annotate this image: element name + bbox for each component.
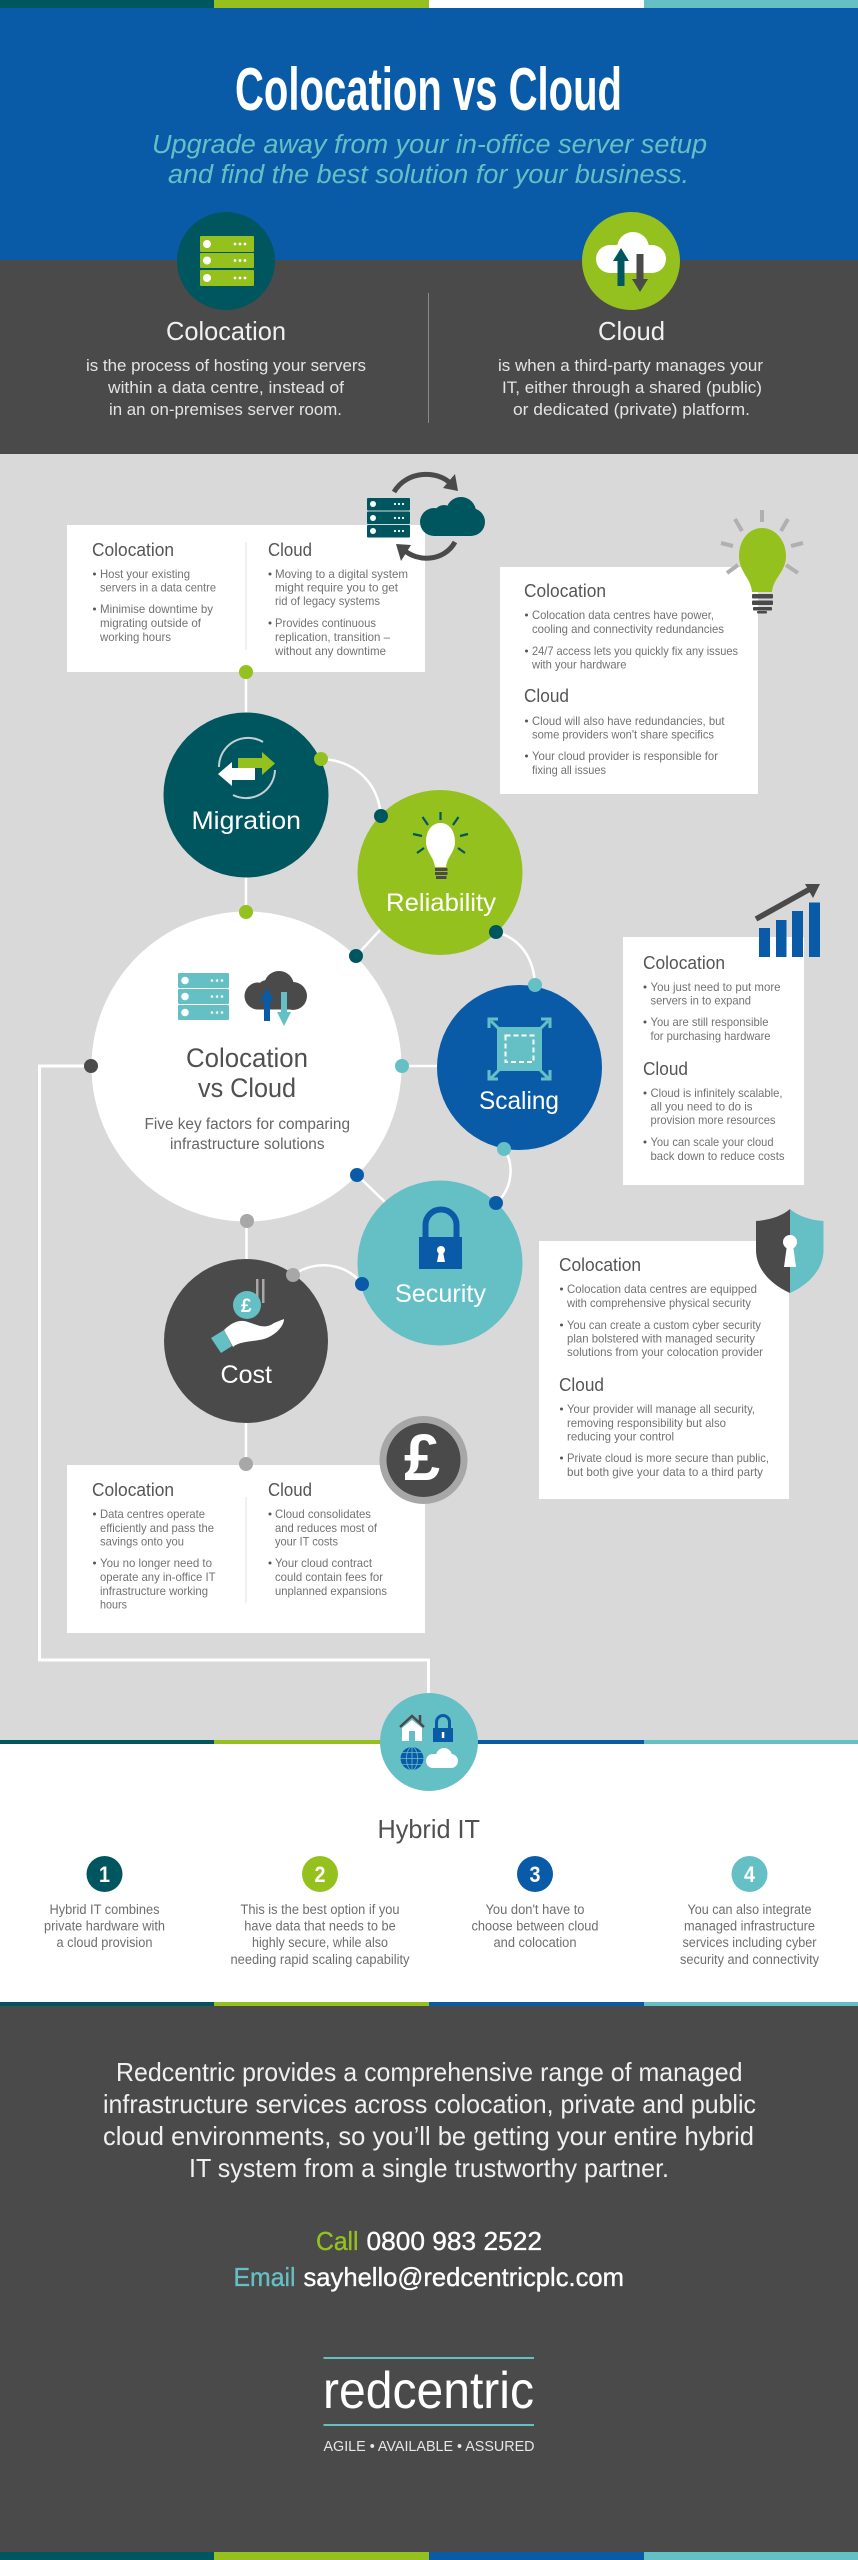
heading: colocation: Colocation: [166, 316, 286, 346]
heading: colocation: Colocation: [92, 539, 174, 560]
label: Scaling: [479, 1087, 559, 1115]
cloud security points: [560, 1402, 769, 1479]
hybrid point 2: This is the best option if you: [240, 1902, 400, 1917]
heading: cloud: Cloud: [524, 685, 569, 706]
label: Migration: [192, 807, 301, 835]
colocation scaling points: servers in to expand: [650, 994, 751, 1008]
connector dots: [84, 665, 542, 1471]
heading: cloud: Cloud: [559, 1374, 604, 1395]
central heading: vs Cloud: [198, 1073, 296, 1103]
colocation description: in an on-premises server room.: [109, 400, 342, 419]
circle: migration: [164, 712, 328, 878]
hybrid point 2: have data that needs to be: [244, 1918, 396, 1934]
heading: hybrid IT: Hybrid IT: [378, 1814, 480, 1844]
hybrid point 3: You don't have to: [486, 1902, 584, 1917]
colocation reliability points: [525, 608, 738, 672]
heading: cloud: Cloud: [268, 1479, 312, 1500]
connector lines: [40, 672, 535, 1693]
circle: scaling: [437, 985, 602, 1150]
cloud cost points: unplanned expansions: [275, 1584, 387, 1598]
hybrid point 2: highly secure, while also: [252, 1935, 388, 1950]
colocation security points: Colocation data centres are equipped: [567, 1282, 757, 1296]
colocation security points: You can create a custom cyber security: [567, 1318, 761, 1332]
cloud security points: but both give your data to a third party: [567, 1465, 763, 1479]
icon: hand holding pound coin: [211, 1279, 284, 1353]
colocation reliability points: with your hardware: [531, 658, 627, 672]
cloud security points: Your provider will manage all security,: [567, 1402, 755, 1416]
panel: cost details: [67, 1465, 425, 1633]
cloud scaling points: [644, 1086, 784, 1163]
label: Reliability: [386, 889, 497, 917]
colocation cost points: savings onto you: [100, 1534, 184, 1548]
heading: cloud: Cloud: [268, 539, 312, 560]
label: Security: [395, 1280, 486, 1308]
subtitle: Upgrade away from your in-office server setup: [152, 131, 707, 159]
icon: cloud with arrows: [244, 971, 307, 1026]
colocation migration points: [93, 567, 216, 644]
contact: email: Email: [234, 2262, 296, 2292]
hybrid point 4: 4: [744, 1862, 756, 1887]
hybrid point 1: private hardware with: [44, 1918, 165, 1934]
closing statement: cloud environments, so you’ll be getting your entire hybrid: [103, 2121, 754, 2151]
colocation cost points: Data centres operate: [100, 1507, 205, 1521]
contact: email: sayhello@redcentricplc.com: [304, 2262, 624, 2292]
colocation migration points: Minimise downtime by: [100, 602, 213, 616]
colocation description: is the process of hosting your servers: [86, 356, 366, 375]
label: Cost: [220, 1361, 272, 1389]
circle: security: [358, 1180, 522, 1346]
cloud migration points: rid of legacy systems: [275, 594, 380, 608]
panel: scaling details: [623, 937, 804, 1185]
cloud scaling points: You can scale your cloud: [650, 1135, 774, 1149]
colocation cost points: infrastructure working: [100, 1584, 208, 1598]
hybrid point 4: [680, 1856, 819, 1967]
icon: pound badge: £: [404, 1420, 440, 1494]
central subtitle: Five key factors for comparing: [144, 1116, 350, 1133]
colocation security points: plan bolstered with managed security: [567, 1332, 755, 1346]
cloud scaling points: all you need to do is: [650, 1100, 752, 1114]
hybrid point 4: You can also integrate: [688, 1902, 812, 1917]
footer: [0, 2002, 858, 2560]
logo: redcentric: redcentric: [323, 2362, 534, 2420]
central heading: [186, 1043, 308, 1103]
heading: colocation: Colocation: [524, 580, 606, 601]
cloud scaling points: Cloud is infinitely scalable,: [650, 1086, 782, 1100]
icon: server and cloud sync: [367, 474, 485, 561]
hybrid point 3: [472, 1856, 598, 1950]
title: Colocation vs Cloud: [235, 56, 622, 123]
cloud migration points: replication, transition –: [275, 630, 390, 644]
icon: shield with keyhole: [756, 1209, 824, 1293]
colocation scaling points: for purchasing hardware: [650, 1029, 771, 1043]
logo: redcentric: [323, 2357, 534, 2455]
colocation reliability points: Colocation data centres have power,: [532, 608, 714, 622]
central subtitle: infrastructure solutions: [170, 1136, 325, 1153]
closing statement: IT system from a single trustworthy partner.: [189, 2153, 669, 2183]
heading: colocation: Colocation: [643, 952, 725, 973]
cloud description: [498, 356, 763, 419]
icon: large green light bulb: [721, 510, 803, 614]
hybrid point 1: a cloud provision: [56, 1935, 152, 1950]
central subtitle: [144, 1116, 350, 1153]
cloud reliability points: fixing all issues: [532, 763, 606, 777]
cloud security points: removing responsibility but also: [567, 1416, 726, 1430]
colocation security points: [560, 1282, 763, 1359]
cloud scaling points: back down to reduce costs: [650, 1149, 784, 1163]
icon: padlock: [419, 1210, 462, 1269]
central circle: colocation vs cloud: [92, 912, 402, 1222]
panel: security details: [539, 1241, 789, 1499]
cloud reliability points: some providers won't share specifics: [532, 728, 714, 742]
icon: migration arrows: [218, 738, 275, 798]
colocation definition: [86, 212, 366, 419]
contact: call: 0800 983 2522: [366, 2226, 542, 2256]
icon: scaling square: [489, 1019, 550, 1079]
colocation description: [86, 356, 366, 419]
section: hybrid IT: [0, 1693, 858, 2002]
colocation reliability points: cooling and connectivity redundancies: [532, 622, 724, 636]
hybrid point 3: and colocation: [494, 1935, 576, 1950]
logo: redcentric: AGILE • AVAILABLE • ASSURED: [324, 2439, 534, 2455]
contact: call: Call: [316, 2226, 358, 2256]
cloud security points: Private cloud is more secure than public,: [567, 1451, 769, 1465]
cloud scaling points: provision more resources: [650, 1113, 776, 1127]
colocation reliability points: 24/7 access lets you quickly fix any issues: [532, 644, 738, 658]
cloud definition: [498, 212, 763, 419]
cloud migration points: might require you to get: [275, 580, 399, 594]
colocation security points: with comprehensive physical security: [566, 1296, 751, 1310]
cloud migration points: without any downtime: [274, 644, 386, 658]
hybrid point 2: 2: [314, 1862, 326, 1887]
cloud description: is when a third-party manages your: [498, 356, 763, 375]
closing statement: infrastructure services across colocation, private and public: [103, 2089, 756, 2119]
colocation cost points: You no longer need to: [100, 1556, 212, 1570]
colocation scaling points: You are still responsible: [650, 1015, 769, 1029]
header banner: [0, 0, 858, 260]
icon: server: [178, 973, 229, 1020]
hybrid point 1: Hybrid IT combines: [50, 1902, 160, 1917]
cloud cost points: Your cloud contract: [275, 1556, 373, 1570]
colocation scaling points: [644, 980, 781, 1043]
colocation cost points: hours: [100, 1598, 127, 1612]
cloud cost points: could contain fees for: [275, 1570, 383, 1584]
cloud security points: reducing your control: [567, 1430, 674, 1444]
hybrid point 4: managed infrastructure: [684, 1918, 815, 1934]
hybrid point 4: security and connectivity: [680, 1952, 819, 1967]
colocation migration points: servers in a data centre: [100, 580, 216, 594]
icon: hybrid circle: [380, 1693, 478, 1791]
circle: reliability: [358, 790, 522, 955]
hybrid point 1: 1: [99, 1862, 110, 1887]
cloud reliability points: Cloud will also have redundancies, but: [532, 714, 725, 728]
cloud reliability points: Your cloud provider is responsible for: [532, 749, 718, 763]
cloud cost points: [268, 1507, 387, 1598]
cloud cost points: and reduces most of: [275, 1521, 378, 1535]
cloud migration points: Provides continuous: [275, 616, 376, 630]
icon: growth bar chart with arrow: [756, 884, 820, 957]
icon: cloud on green circle: [582, 212, 680, 310]
definitions band: [0, 212, 858, 454]
colocation cost points: [93, 1507, 216, 1612]
closing statement: Redcentric provides a comprehensive range of managed: [116, 2057, 742, 2087]
colocation description: within a data centre, instead of: [107, 378, 344, 397]
panel: migration details: [67, 525, 425, 672]
colocation security points: solutions from your colocation provider: [567, 1345, 763, 1359]
cloud migration points: Moving to a digital system: [275, 567, 408, 581]
cloud reliability points: [525, 714, 725, 777]
colocation cost points: efficiently and pass the: [100, 1521, 214, 1535]
panel: reliability details: [500, 567, 758, 794]
icon: hand holding pound coin: £: [241, 1296, 252, 1317]
hybrid point 2: needing rapid scaling capability: [230, 1952, 410, 1967]
closing statement: [103, 2057, 756, 2183]
icon: white bulb: [413, 812, 468, 879]
cloud cost points: Cloud consolidates: [275, 1507, 371, 1521]
cloud description: IT, either through a shared (public): [502, 378, 762, 397]
hybrid point 3: choose between cloud: [472, 1918, 598, 1934]
colocation cost points: operate any in-office IT: [100, 1570, 216, 1584]
heading: colocation: Colocation: [559, 1254, 641, 1275]
cloud cost points: your IT costs: [275, 1534, 338, 1548]
central heading: Colocation: [186, 1043, 308, 1073]
colocation scaling points: You just need to put more: [650, 980, 781, 994]
hybrid point 2: [230, 1856, 410, 1967]
icon: pound badge: [380, 1416, 468, 1504]
colocation migration points: working hours: [99, 630, 171, 644]
subtitle: [152, 131, 707, 189]
heading: colocation: Colocation: [92, 1479, 174, 1500]
subtitle: and find the best solution for your business.: [168, 161, 689, 189]
colocation migration points: migrating outside of: [100, 616, 202, 630]
hybrid point 3: 3: [530, 1862, 540, 1887]
cloud description: or dedicated (private) platform.: [513, 400, 750, 419]
icon: server on teal circle: [177, 212, 275, 310]
heading: cloud: Cloud: [643, 1058, 688, 1079]
colocation migration points: Host your existing: [100, 567, 190, 581]
cloud migration points: [268, 567, 408, 658]
hybrid point 4: services including cyber: [682, 1935, 817, 1950]
hybrid point 1: [44, 1856, 165, 1950]
heading: cloud: Cloud: [598, 316, 665, 346]
circle: cost: [164, 1259, 328, 1423]
